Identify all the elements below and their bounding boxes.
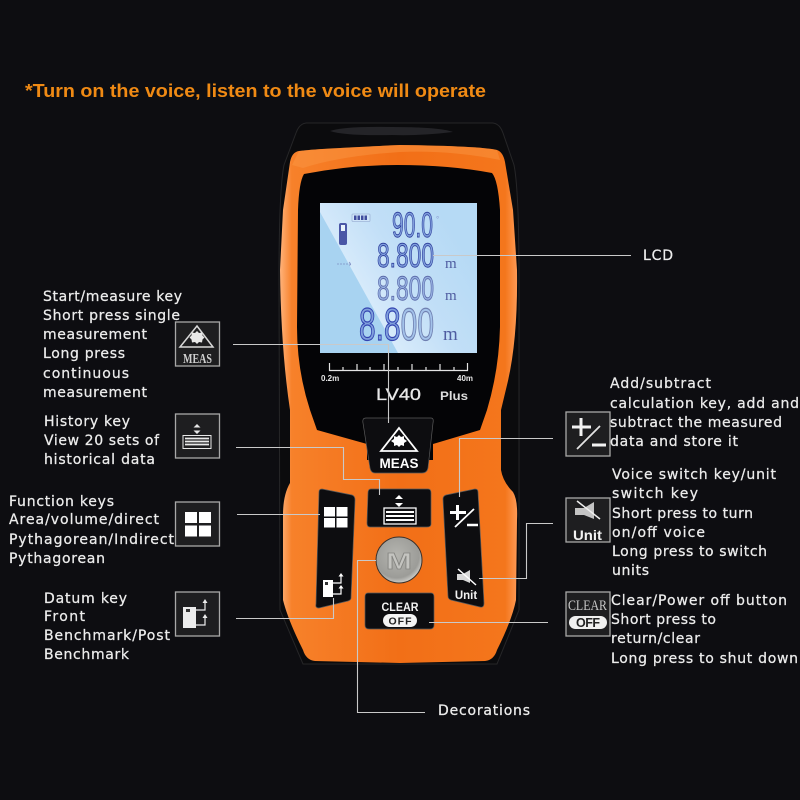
LCD readings: 8.800 xyxy=(377,237,434,275)
laser aperture xyxy=(330,127,453,135)
orange top highlight xyxy=(292,145,500,168)
add-subtract / unit rocker key xyxy=(443,489,484,607)
model name: Plus xyxy=(440,389,468,403)
text: history key: History key xyxy=(44,414,130,430)
icon: voice unit: Unit xyxy=(573,527,602,543)
LCD readings: m xyxy=(445,256,457,272)
arrow glyph xyxy=(337,262,351,266)
clear / off button: CLEAR xyxy=(382,600,419,614)
text: voice unit key: on/off voice xyxy=(612,525,705,541)
text: add subtract key: data and store it xyxy=(610,434,738,450)
text: history key: historical data xyxy=(44,452,155,468)
text: clear power off: Clear/Power off button xyxy=(611,593,787,609)
text: start measure key: Long press xyxy=(43,346,125,362)
text: clear power off: Short press to xyxy=(611,612,716,628)
add-subtract / unit rocker key: Unit xyxy=(455,590,477,602)
icon: clear off: OFF xyxy=(576,616,600,630)
LCD readings: 8.800 xyxy=(359,299,434,350)
icon: voice unit xyxy=(566,498,610,543)
text: start measure key: measurement xyxy=(43,327,148,343)
text: datum key: Benchmark/Post xyxy=(44,628,170,644)
text: datum key: Datum key xyxy=(44,591,127,607)
text: add subtract key: calculation key, add and xyxy=(610,396,799,412)
icon: history xyxy=(176,414,220,458)
text: voice unit key xyxy=(612,467,776,579)
leader lines xyxy=(233,256,631,712)
LCD readings: 8.800 xyxy=(377,270,434,308)
decorative silver M button xyxy=(376,537,422,583)
text: voice unit key: units xyxy=(612,563,649,579)
history button xyxy=(367,489,431,527)
device glyph xyxy=(339,223,349,245)
text: function keys: Pythagorean xyxy=(9,551,105,567)
text: add subtract key: Add/subtract xyxy=(610,376,712,392)
icon: MEAS xyxy=(176,322,220,367)
text: start measure key: Short press single xyxy=(43,308,180,324)
text: start measure key: continuous xyxy=(43,366,129,382)
text: clear power off: return/clear xyxy=(611,631,700,647)
text: voice unit key: Short press to turn xyxy=(612,506,753,522)
function / datum rocker key xyxy=(316,489,355,608)
text: datum key: Front xyxy=(44,609,86,625)
text: start measure key xyxy=(43,289,182,401)
range scale: 0.2m xyxy=(321,374,339,383)
orange body xyxy=(280,145,517,663)
text: start measure key: Start/measure key xyxy=(43,289,182,305)
LCD readings xyxy=(359,206,458,350)
LCD readings: 90.0 xyxy=(392,206,433,245)
text: function keys: Area/volume/direct xyxy=(9,512,160,528)
model name xyxy=(376,385,468,404)
text: clear power off xyxy=(611,593,798,667)
text: LCD label: LCD xyxy=(643,248,673,264)
clear / off button xyxy=(365,593,434,629)
title: *Turn on the voice, listen to the voice will operate xyxy=(25,81,486,101)
icon: add subtract xyxy=(566,412,610,456)
text: datum key xyxy=(44,591,170,663)
LCD screen xyxy=(320,203,477,353)
LCD readings: ° xyxy=(436,215,439,224)
LCD readings: m xyxy=(443,324,458,345)
MEAS button: MEAS xyxy=(380,455,418,471)
text: function keys: Pythagorean/Indirect xyxy=(9,532,174,548)
text: datum key: Benchmark xyxy=(44,647,130,663)
text: clear power off: Long press to shut down xyxy=(611,651,798,667)
text: history key xyxy=(44,414,160,468)
battery icon xyxy=(352,214,370,222)
text: function keys: Function keys xyxy=(9,494,114,510)
text: voice unit key: Long press to switch xyxy=(612,544,767,560)
text: voice unit key: switch key xyxy=(612,486,698,502)
text: voice unit key: Voice switch key/unit xyxy=(612,467,776,483)
text: add subtract key: subtract the measured xyxy=(610,415,782,431)
text: start measure key: measurement xyxy=(43,385,148,401)
device black casing xyxy=(279,123,519,664)
text: add subtract key xyxy=(610,376,799,450)
range scale: 40m xyxy=(457,374,473,383)
LCD readings: m xyxy=(445,288,457,304)
decorative silver M button: M xyxy=(386,548,412,574)
model name: LV40 xyxy=(376,385,421,404)
MEAS button xyxy=(363,418,433,473)
clear / off button: OFF xyxy=(388,616,412,628)
icon: function grid xyxy=(176,502,220,546)
icon: clear off: CLEAR xyxy=(568,598,607,614)
icon: MEAS: MEAS xyxy=(183,352,212,367)
range scale xyxy=(321,363,473,383)
black face panel xyxy=(297,165,500,460)
icon: datum xyxy=(176,592,220,636)
text: decorations label: Decorations xyxy=(438,703,530,719)
icon: clear off xyxy=(566,592,610,636)
text: history key: View 20 sets of xyxy=(44,433,160,449)
device: laser distance meter xyxy=(279,123,519,664)
text: function keys xyxy=(9,494,174,567)
